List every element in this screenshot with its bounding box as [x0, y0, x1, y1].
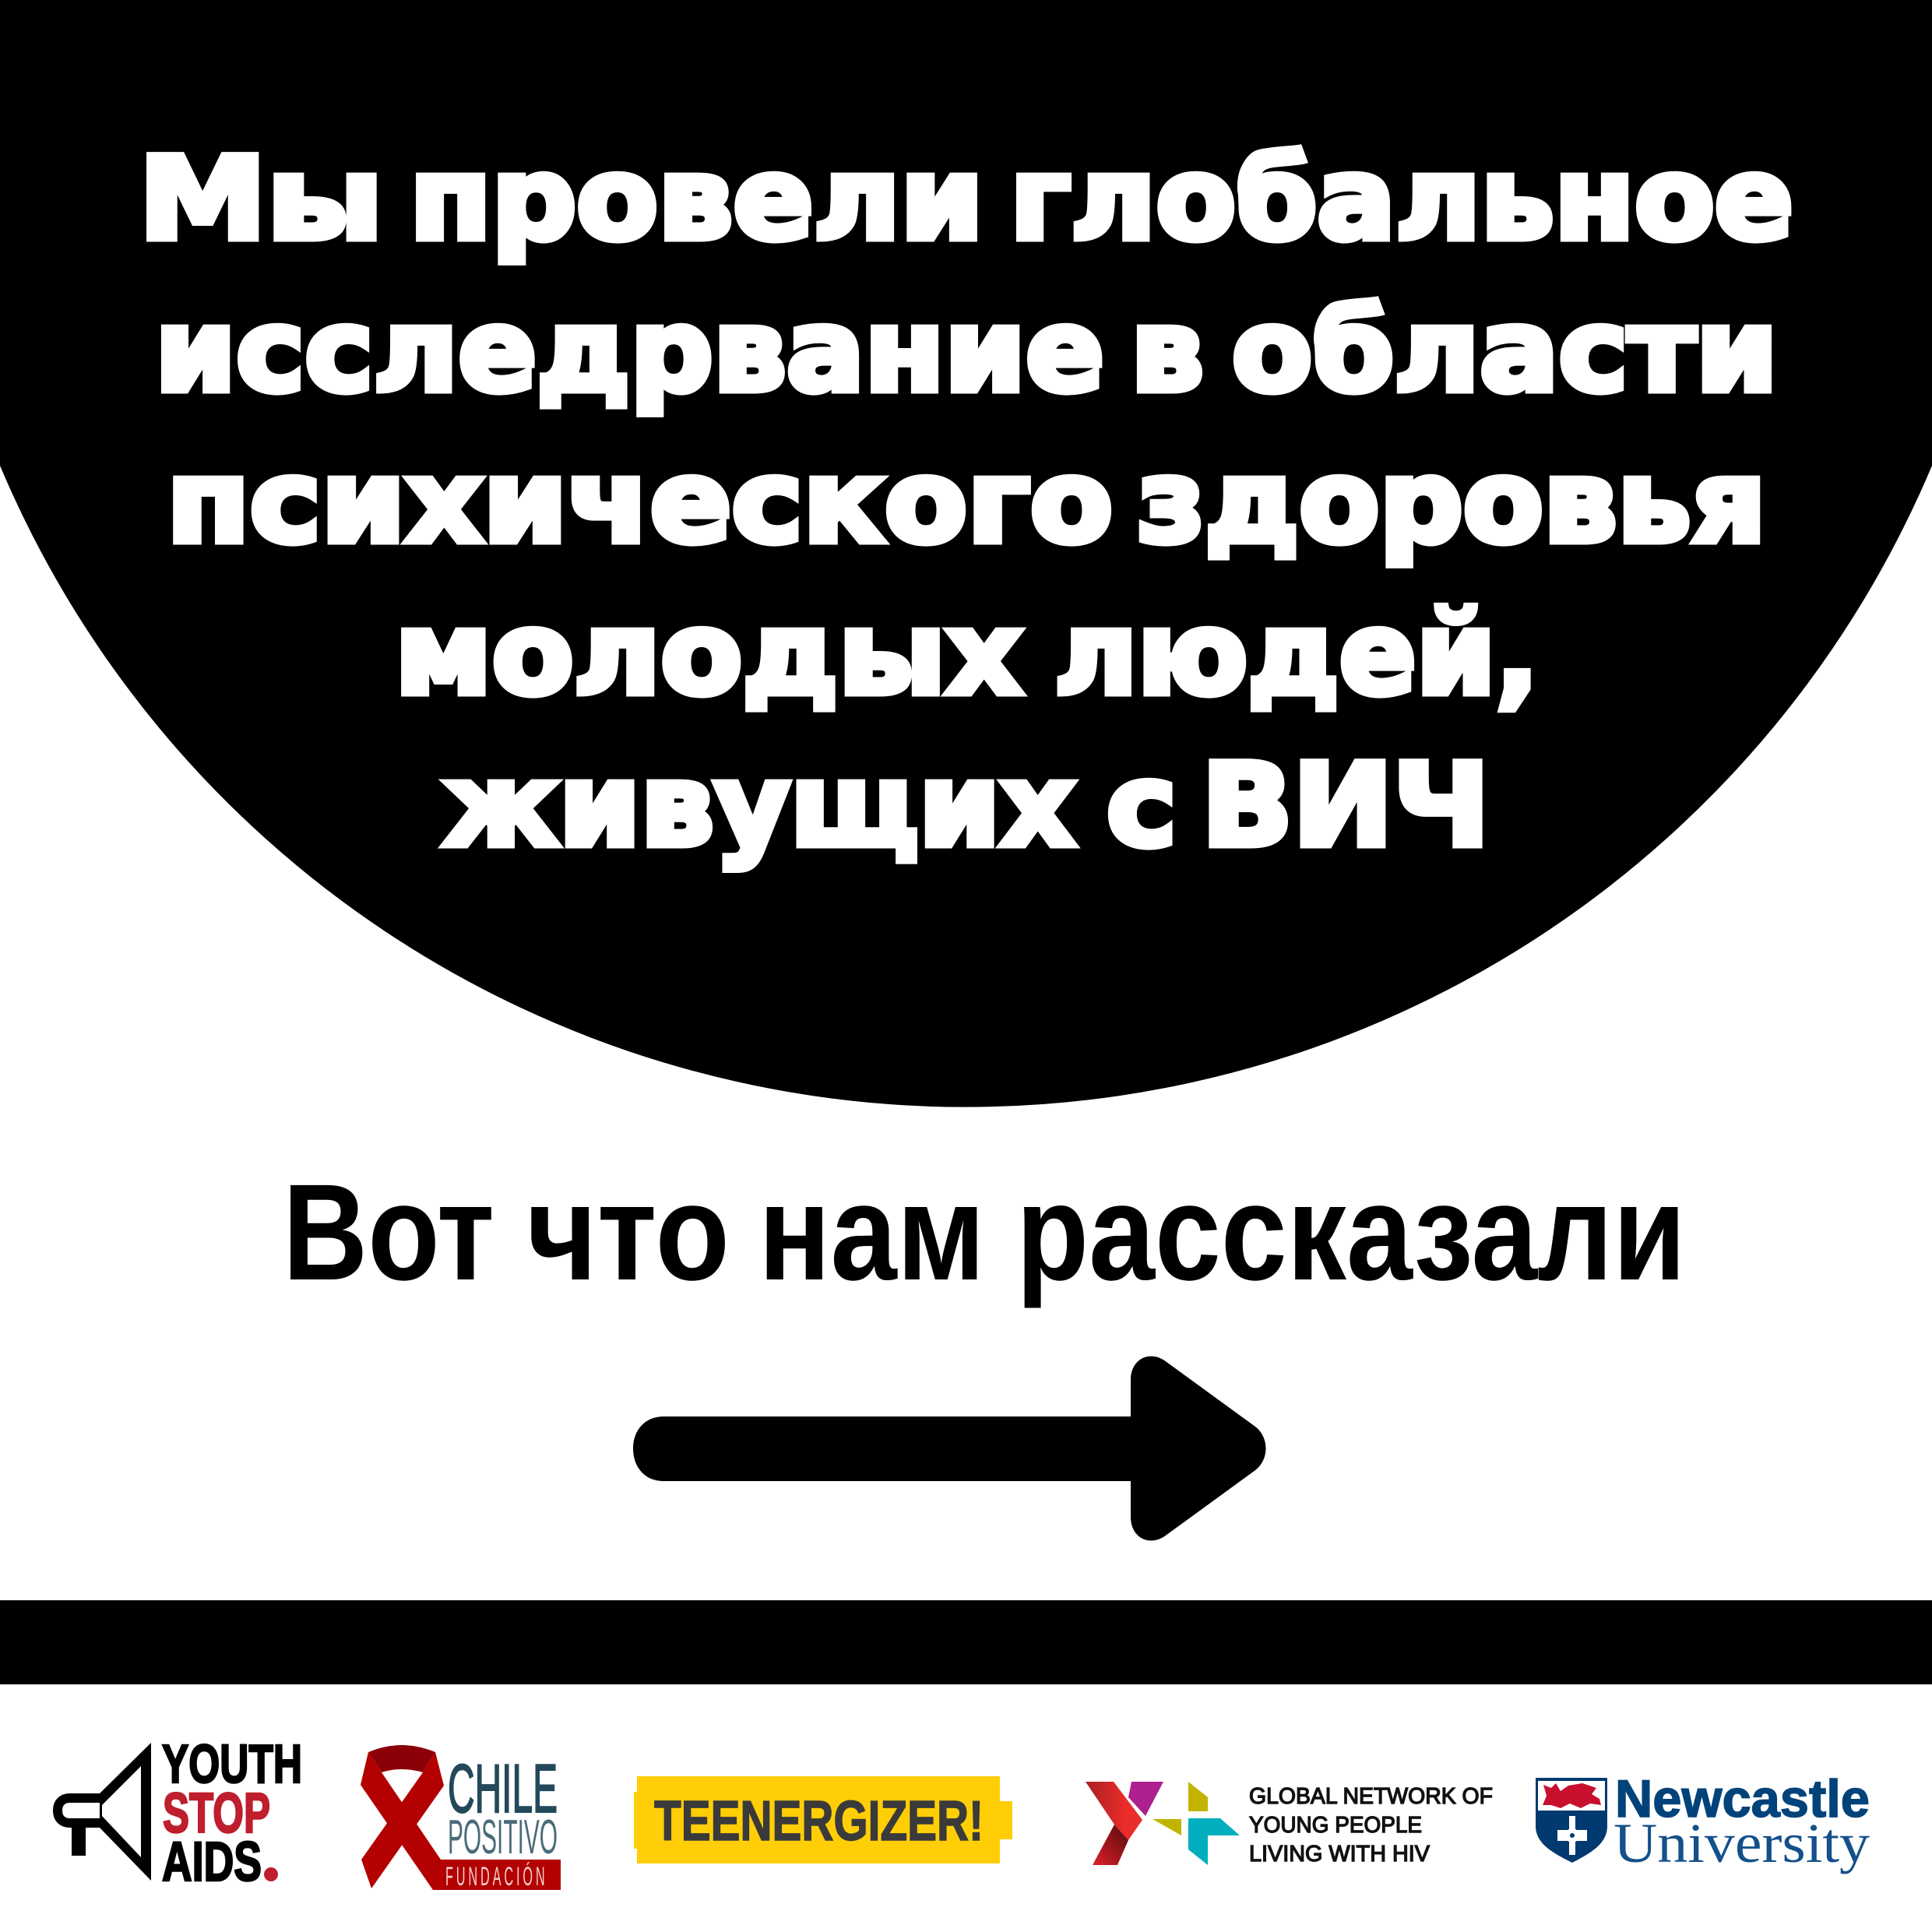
icon: megaphone — [58, 1743, 151, 1881]
icon: Y plus mark — [1086, 1782, 1240, 1865]
icon: shield — [1536, 1778, 1607, 1863]
logo text: Newcastle — [1615, 1769, 1870, 1828]
title: провели — [410, 133, 984, 266]
logo text: AIDS — [162, 1832, 262, 1893]
title: в — [1131, 285, 1204, 417]
logo text: GLOBAL NETWORK OF — [1249, 1784, 1493, 1809]
logo: Fundación Chile Positivo — [361, 1745, 561, 1892]
logos row: POSITIVO — [448, 1811, 558, 1864]
title: людей, — [1054, 588, 1539, 720]
subtitle — [283, 1156, 1686, 1309]
logo: Teenergizer — [634, 1776, 1012, 1863]
title: с — [1107, 740, 1177, 872]
title: области — [1232, 285, 1778, 417]
logos row — [58, 1733, 1870, 1893]
logo: Youth Stop AIDS — [58, 1733, 302, 1893]
logo: Newcastle University — [1536, 1769, 1870, 1874]
title: психического — [167, 436, 1113, 568]
arrow — [633, 1357, 1266, 1540]
subtitle: рассказали — [1016, 1156, 1686, 1309]
title — [139, 133, 1793, 872]
logo text — [445, 1750, 558, 1892]
logo text — [1249, 1784, 1493, 1867]
title: ВИЧ — [1202, 740, 1490, 872]
black footer bar — [0, 1600, 1932, 1684]
logo text: CHILE — [448, 1750, 558, 1827]
title: молодых — [395, 588, 1022, 720]
icon: yellow battery — [634, 1776, 1012, 1863]
subtitle: нам — [758, 1156, 985, 1309]
title: здоровья — [1137, 436, 1766, 568]
logo: Newcastle University: University — [1614, 1812, 1870, 1874]
logo text: STOP — [163, 1782, 270, 1845]
panel: black semicircle header — [0, 0, 1932, 1107]
logo text: YOUTH — [162, 1733, 302, 1794]
logo text: LIVING WITH HIV — [1249, 1842, 1431, 1867]
title: живущих — [443, 740, 1075, 872]
logo text: YOUNG PEOPLE — [1249, 1813, 1422, 1838]
logo text: TEENERGIZER! — [654, 1790, 984, 1853]
title: глобальное — [1010, 133, 1793, 266]
subtitle: что — [526, 1156, 730, 1309]
subtitle: Вот — [283, 1156, 494, 1309]
title: исследрвание — [155, 285, 1104, 417]
logo: GNP+ — [1086, 1782, 1493, 1867]
icon: red ribbon — [361, 1745, 561, 1890]
logo text: FUNDACIÓN — [445, 1861, 548, 1892]
title: Мы — [139, 133, 383, 266]
logo text — [162, 1733, 302, 1893]
